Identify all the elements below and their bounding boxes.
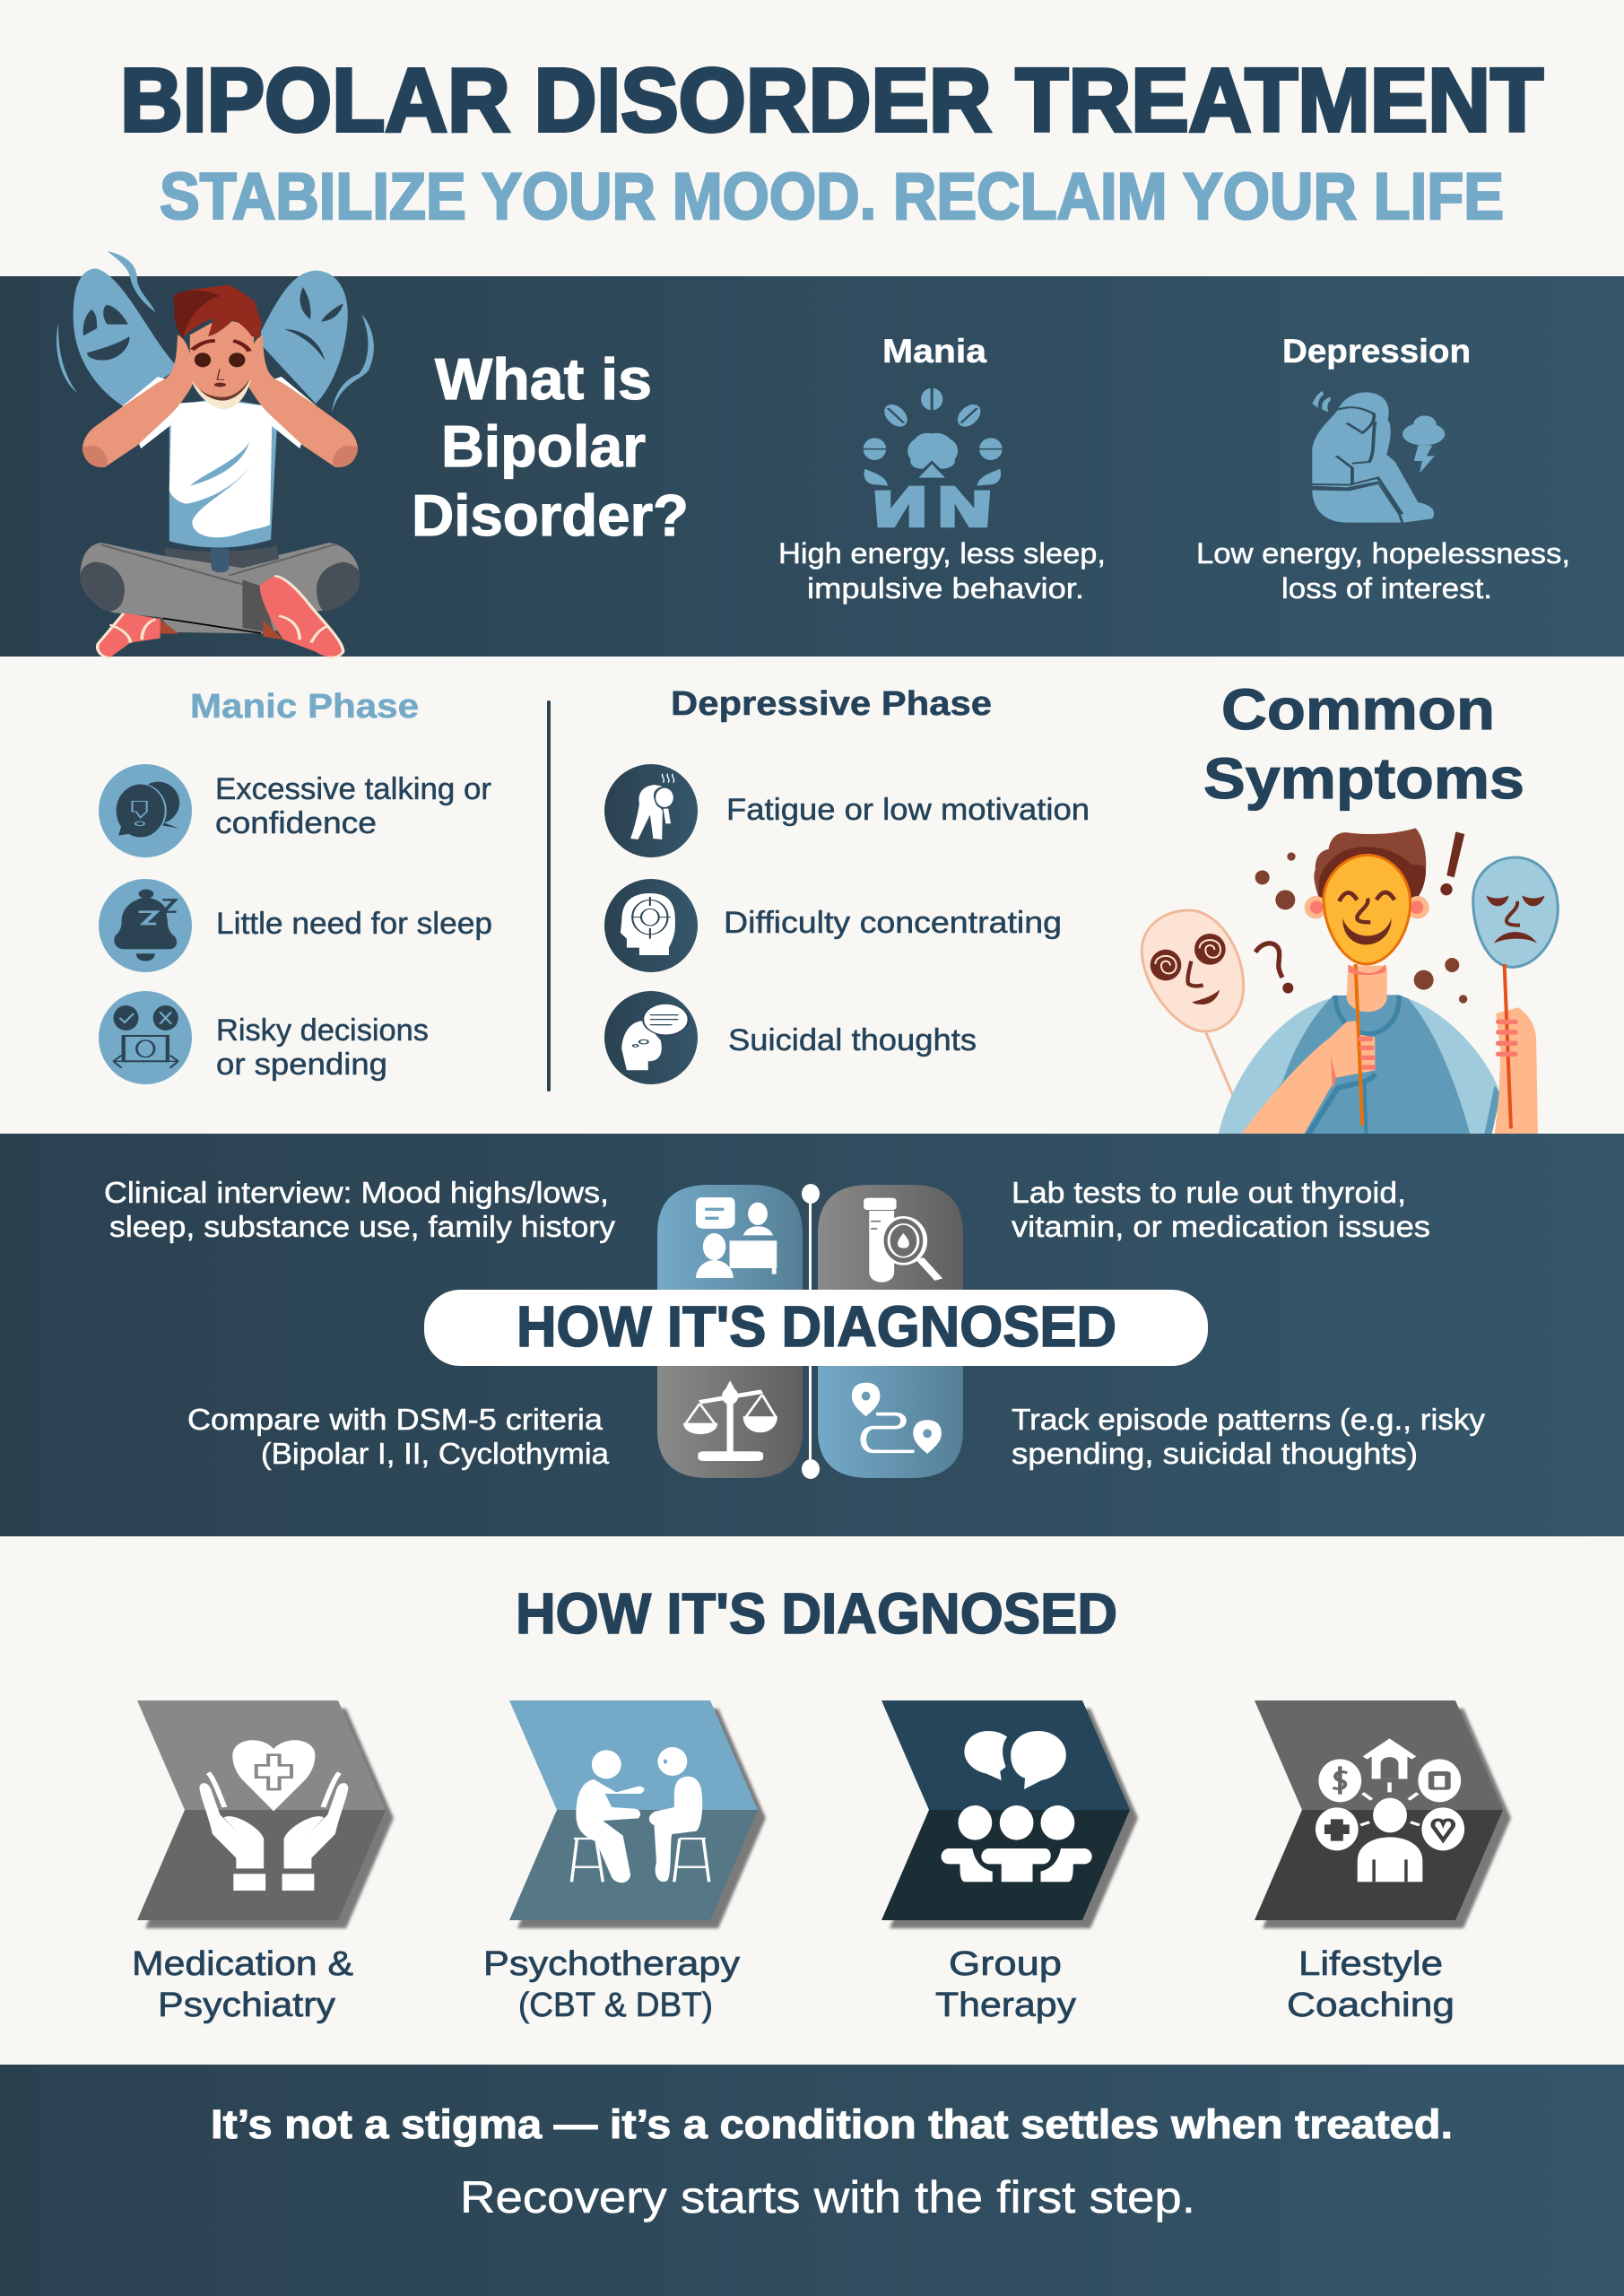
- panel: common symptoms: [99, 677, 1558, 1135]
- icon: person with life areas: [1316, 1738, 1464, 1882]
- icon: mania figure juggling pills: [860, 387, 1005, 527]
- card: lifestyle coaching: Lifestyle: [1298, 1945, 1443, 1983]
- panel: footer message: [0, 2065, 1624, 2296]
- card: group therapy: Group: [949, 1945, 1062, 1983]
- card: medication and psychiatry: Psychiatry: [158, 1987, 335, 2024]
- icon: balance scales: [683, 1380, 777, 1461]
- card: mania: [778, 333, 1106, 604]
- card: psychotherapy: [483, 1700, 766, 2024]
- step: DSM-5 criteria: Compare with DSM-5 criteria: [187, 1403, 604, 1436]
- heading: what is bipolar disorder: [412, 346, 689, 548]
- heading: what is bipolar disorder: What is: [435, 346, 652, 412]
- column: depressive phase: Depressive Phase: [671, 685, 992, 723]
- step: track patterns: Track episode patterns (e.g., risky: [1012, 1403, 1486, 1436]
- card: lifestyle coaching: [1255, 1700, 1511, 2024]
- step: DSM-5 criteria: [187, 1345, 803, 1478]
- symptom: little need for sleep: [99, 879, 492, 972]
- card: psychotherapy: Psychotherapy: [483, 1945, 740, 1983]
- symptom: suicidal thoughts: [604, 991, 977, 1084]
- title: BIPOLAR DISORDER TREATMENT: [120, 50, 1543, 151]
- icon: group with speech bubbles: [942, 1731, 1092, 1882]
- heading: common symptoms: [1203, 677, 1524, 811]
- symptom: fatigue: Fatigue or low motivation: [726, 793, 1090, 827]
- subtitle: STABILIZE YOUR MOOD. RECLAIM YOUR LIFE: [160, 161, 1504, 233]
- step: DSM-5 criteria: (Bipolar I, II, Cyclothymia: [261, 1437, 610, 1470]
- illustration: person with three masks: [1142, 828, 1558, 1135]
- heading: what is bipolar disorder: Bipolar: [441, 413, 646, 479]
- card: depression: Low energy, hopelessness,: [1196, 537, 1570, 570]
- symptom: risky decisions: [99, 991, 429, 1084]
- heading pill: how it's diagnosed: [424, 1290, 1208, 1366]
- panel: what is bipolar disorder: [0, 251, 1624, 657]
- card: depression: Depression: [1282, 333, 1471, 370]
- panel: footer message: It’s not a stigma — it’s a condition that settles when treated.: [211, 2101, 1453, 2147]
- card: psychotherapy: (CBT & DBT): [518, 1987, 713, 2024]
- column: manic phase: Manic Phase: [190, 688, 419, 726]
- step: lab tests: [818, 1176, 1430, 1327]
- icon: two people on stools: [571, 1747, 709, 1883]
- icon: route with pins: [852, 1383, 942, 1454]
- icon: depressed seated figure with storm cloud: [1312, 391, 1445, 523]
- panel: footer message: Recovery starts with the first step.: [460, 2172, 1195, 2222]
- symptom: excessive talking: [99, 764, 491, 857]
- card: depression: [1196, 333, 1570, 604]
- column: manic phase: [99, 688, 492, 1084]
- heading pill: how it's diagnosed: HOW IT'S DIAGNOSED: [517, 1294, 1116, 1359]
- heading: what is bipolar disorder: Disorder?: [412, 483, 689, 548]
- heading: common symptoms: Symptoms: [1203, 746, 1524, 811]
- symptom: risky decisions: or spending: [216, 1048, 387, 1082]
- heading: common symptoms: Common: [1221, 677, 1495, 742]
- panel: how it's diagnosed: [0, 1134, 1624, 1536]
- card: medication and psychiatry: [132, 1700, 394, 2024]
- symptom: difficulty concentrating: [604, 879, 1062, 972]
- step: track patterns: spending, suicidal thoughts): [1012, 1437, 1418, 1470]
- symptom: difficulty concentrating: Difficulty concentrating: [724, 906, 1062, 940]
- symptom: excessive talking: confidence: [215, 806, 377, 840]
- diagram: centre line: [802, 1184, 820, 1479]
- symptom: fatigue: [604, 764, 1090, 857]
- card: group therapy: Therapy: [935, 1987, 1076, 2024]
- heading: treatments: HOW IT'S DIAGNOSED: [516, 1581, 1117, 1646]
- column: depressive phase: [604, 685, 1090, 1084]
- icon: test tube and magnifier: [864, 1198, 939, 1283]
- step: clinical interview: Clinical interview: Mood highs/lows,: [104, 1176, 609, 1209]
- card: mania: impulsive behavior.: [807, 572, 1084, 604]
- card: mania: High energy, less sleep,: [778, 537, 1106, 570]
- illustration: stressed man with two ghost faces: [56, 251, 374, 657]
- card: medication and psychiatry: Medication &: [132, 1945, 353, 1983]
- step: track patterns: [818, 1345, 1486, 1478]
- step: clinical interview: sleep, substance use, family history: [109, 1210, 616, 1243]
- card: mania: Mania: [882, 333, 986, 370]
- card: lifestyle coaching: Coaching: [1287, 1987, 1455, 2024]
- symptom: suicidal thoughts: Suicidal thoughts: [728, 1023, 977, 1057]
- panel: treatment options: [132, 1581, 1511, 2024]
- card: group therapy: [881, 1700, 1138, 2024]
- step: clinical interview: [104, 1176, 803, 1327]
- symptom: little need for sleep: Little need for sleep: [216, 907, 492, 941]
- icon: hands holding heart: [199, 1740, 348, 1891]
- symptom: excessive talking: Excessive talking or: [215, 772, 491, 806]
- step: lab tests: Lab tests to rule out thyroid,: [1012, 1176, 1406, 1209]
- icon: interview: [696, 1197, 777, 1278]
- step: lab tests: vitamin, or medication issues: [1012, 1210, 1430, 1243]
- card: depression: loss of interest.: [1281, 572, 1492, 604]
- symptom: risky decisions: Risky decisions: [216, 1013, 429, 1048]
